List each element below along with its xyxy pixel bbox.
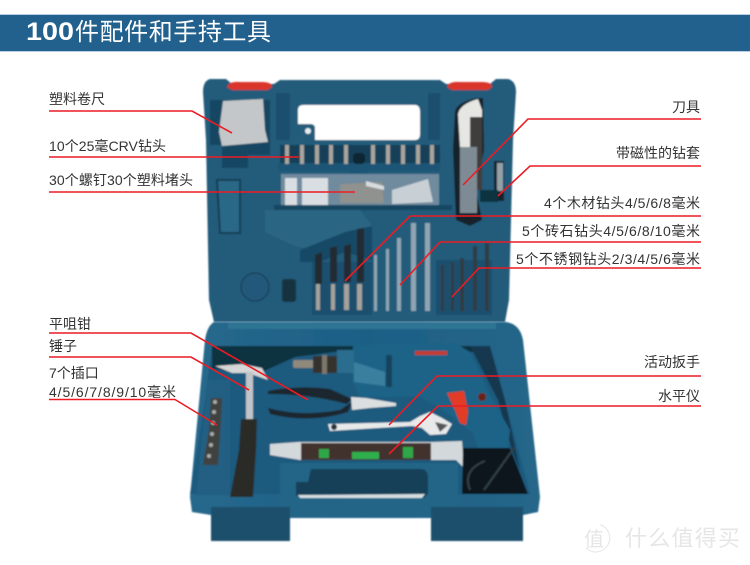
steel drill bits: [441, 243, 489, 311]
label: tape measure: 塑料卷尺: [49, 91, 105, 107]
pliers: [268, 387, 396, 419]
round knob and slot: [241, 273, 269, 301]
tape measure: [219, 99, 268, 146]
hinge band: [228, 323, 496, 329]
title: 件配件和手持工具: [75, 19, 271, 46]
case feet: [211, 507, 523, 541]
callout lines: [49, 111, 701, 454]
title: 100: [26, 18, 74, 46]
watermark: 值: [584, 528, 604, 551]
label: drill bits: 10个25毫CRV钻头: [49, 138, 166, 154]
dark edge recesses: [210, 100, 270, 168]
label: sockets: 7个插口: [49, 365, 99, 381]
adjustable wrench: [328, 412, 452, 435]
watermark: [584, 525, 740, 552]
red trigger: [447, 391, 468, 425]
label: level: 水平仪: [658, 388, 700, 404]
label: socket sizes: 4/5/6/7/8/9/10毫米: [49, 384, 176, 400]
lower-lid moulding: [265, 210, 372, 250]
spirit level: [270, 441, 464, 468]
label: pliers: 平咀钳: [49, 316, 91, 332]
wood drill bits: [315, 228, 364, 310]
label: screws: 30个螺钉30个塑料堵头: [49, 172, 193, 188]
title banner: [0, 14, 750, 52]
hammer: [215, 364, 268, 497]
label: knife: 刀具: [672, 99, 700, 115]
lower case: [190, 322, 540, 541]
label: steel bits: 5个不锈钢钻头2/3/4/5/6毫米: [516, 251, 700, 267]
handle cut-out: [298, 105, 420, 140]
storage pill: [217, 180, 240, 233]
upper case lid: [203, 79, 516, 322]
magnetic bit holder: [480, 161, 504, 202]
carrying handle recess: [280, 463, 458, 517]
label: magnetic holder: 带磁性的钻套: [616, 145, 700, 161]
utility knife: [453, 98, 484, 226]
socket set: [203, 398, 222, 465]
drill bit strip: [278, 145, 440, 173]
drill: [293, 343, 510, 452]
label: hammer: 锤子: [49, 338, 77, 354]
label: wood bits: 4个木材钻头4/5/6/8毫米: [544, 195, 700, 211]
watermark: 什么值得买: [625, 526, 740, 551]
red latches: [227, 82, 492, 90]
label: masonry bits: 5个砖石钻头4/5/6/8/10毫米: [522, 223, 700, 239]
drill brand plate: [415, 351, 447, 355]
screws and plugs tray: [274, 174, 452, 210]
label: wrench: 活动扳手: [644, 354, 700, 370]
socket tray: [196, 380, 230, 495]
masonry drill bits: [374, 223, 430, 311]
power cord: [462, 448, 528, 494]
interior recess: [190, 346, 530, 494]
